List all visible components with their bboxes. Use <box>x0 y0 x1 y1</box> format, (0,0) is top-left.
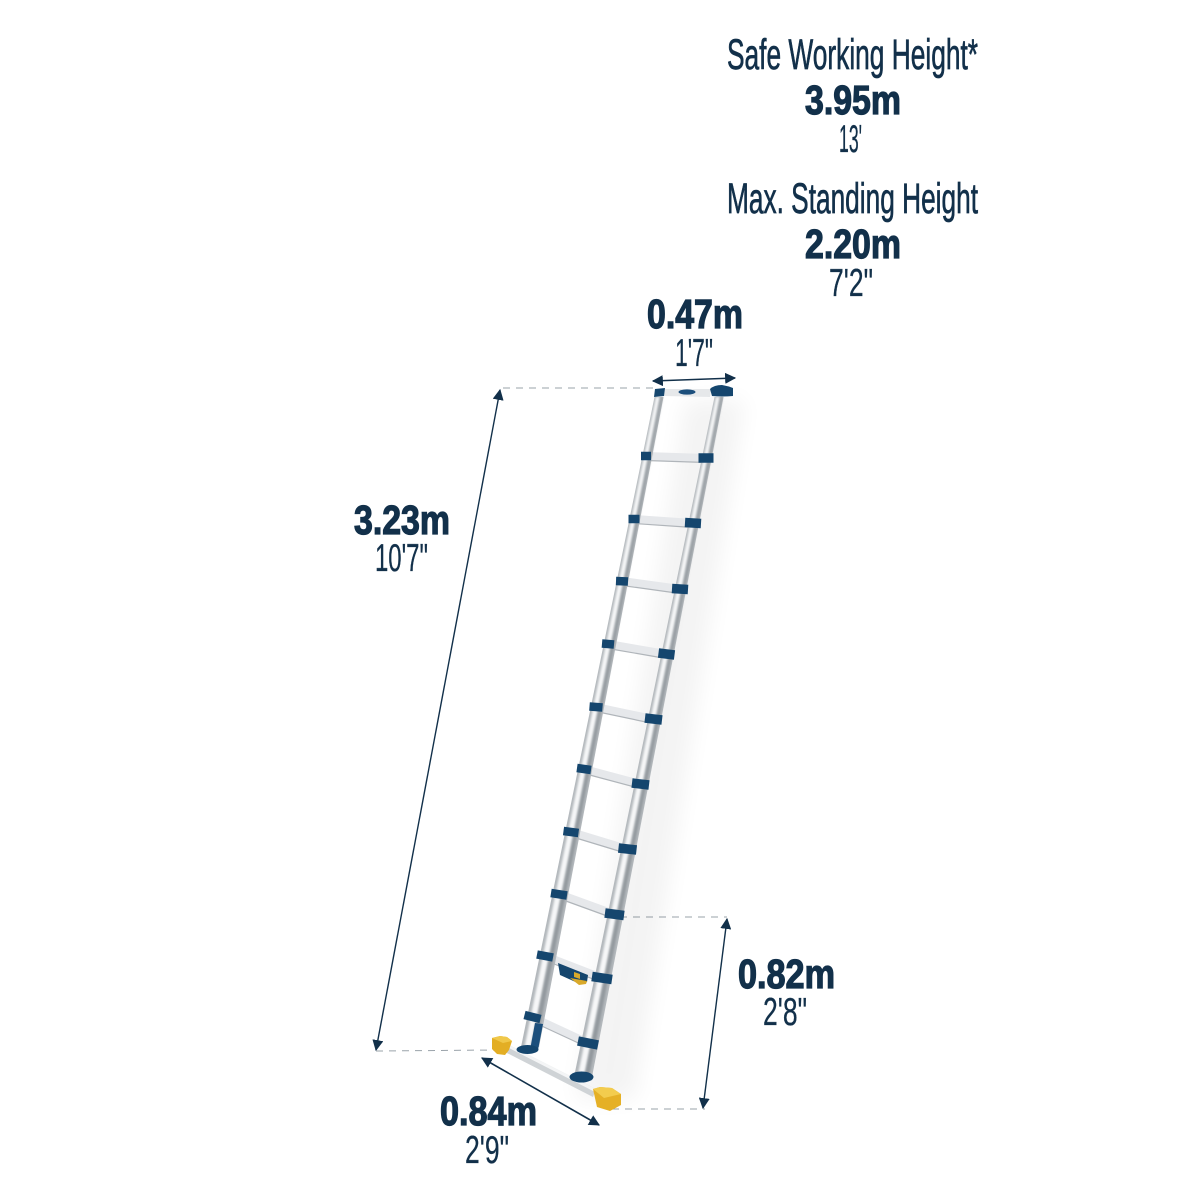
dimension: depth 0.82m: 2'8" <box>763 991 807 1034</box>
left rail <box>521 397 664 1047</box>
dimension: closed length 3.23m: 10'7" <box>375 537 428 580</box>
right rail <box>574 397 724 1077</box>
heading: safe working height: 3.95m <box>805 77 901 123</box>
dimension: base width 0.84m: 2'9" <box>465 1129 509 1172</box>
dimension: top width <box>647 291 743 381</box>
level tool <box>558 963 588 985</box>
dimension: base width 0.84m <box>440 1058 599 1172</box>
heading: safe working height: Safe Working Height* <box>727 31 978 79</box>
heading: safe working height <box>727 31 978 161</box>
heading: safe working height: 13' <box>839 118 862 161</box>
left yellow foot <box>492 1036 512 1055</box>
dimension: top width: 0.47m <box>647 291 743 337</box>
heading: max standing height: 2.20m <box>805 221 901 267</box>
base stabiliser bar <box>503 1042 596 1097</box>
right yellow foot <box>593 1087 621 1111</box>
top rung with badge and caps <box>654 385 733 397</box>
blue rung collars <box>524 456 714 1045</box>
dimension: top width: 1'7" <box>675 332 713 375</box>
dimension: depth 0.82m: 0.82m <box>738 951 835 997</box>
dimension: base width 0.84m: 0.84m <box>440 1088 537 1134</box>
heading: max standing height <box>727 175 978 305</box>
rungs <box>532 456 706 1048</box>
dimension: depth 0.82m <box>612 917 835 1109</box>
dimension: closed length 3.23m: 3.23m <box>354 497 450 543</box>
base brackets and brace <box>516 1023 594 1082</box>
heading: max standing height: 7'2" <box>829 262 873 305</box>
dimension: closed length 3.23m <box>354 388 655 1051</box>
ladder shadow <box>575 400 745 1100</box>
ladder illustration <box>492 385 745 1111</box>
heading: max standing height: Max. Standing Height <box>727 175 978 223</box>
